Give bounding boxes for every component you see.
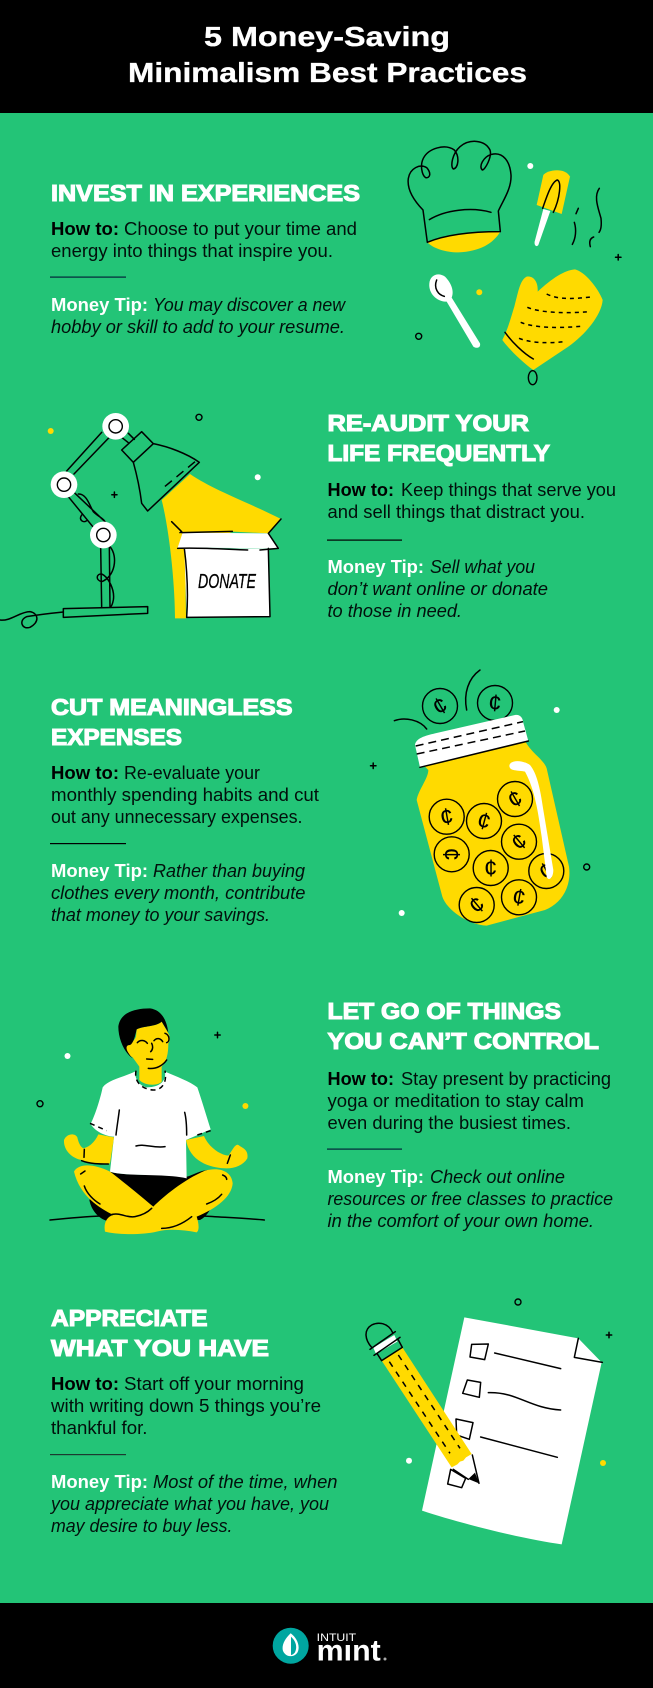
coins: ¢ [484,855,497,882]
how to text: Choose to put your time and [124,218,357,239]
icon: spoon [429,274,480,348]
heading: EXPENSES [51,724,182,750]
how to text: Stay present by practicing [401,1068,611,1089]
money tip text: Rather than buying [153,860,306,881]
money tip text: in the comfort of your own home. [328,1210,594,1231]
how to text [51,218,357,261]
heading: CUT MEANINGLESS [51,694,292,720]
how to text: Re-evaluate your [124,762,260,783]
icon: mint leaf [273,1628,309,1664]
shirt [91,1072,211,1178]
logo: intuit mint: INTUIT [317,1632,356,1644]
money tip text: Money Tip: [51,1471,148,1492]
money tip text: clothes every month, contribute [51,882,306,903]
coins: ¢ [534,856,559,886]
heading [328,998,599,1054]
body line details [81,1033,230,1228]
legs [74,1165,233,1234]
money tip text: Most of the time, when [153,1471,338,1492]
money tip text [49,1471,337,1536]
how to text: Start off your morning [124,1373,304,1394]
jar body [394,670,569,926]
how to text [328,479,616,522]
jar lid and highlight [415,715,553,879]
money tip text [51,860,306,925]
light beam [162,474,281,618]
panel: cut meaningless expenses [50,670,590,926]
money tip text [328,1166,613,1231]
illustration: checklist and pencil [366,1317,602,1544]
icon: checklist paper [422,1317,602,1544]
money tip text: may desire to buy less. [51,1515,232,1536]
coins: ¢ [438,848,465,861]
heading: APPRECIATE [51,1305,208,1331]
header banner [0,0,653,113]
logo: intuit mint: mint [317,1635,381,1668]
illustration: coin jar [370,670,590,926]
money tip text: resources or free classes to practice [328,1188,613,1209]
heading: LET GO OF THINGS [328,998,561,1024]
money tip text: Money Tip: [328,1166,424,1187]
icon: chef hat [408,141,511,252]
hair [118,1008,168,1058]
title [128,21,527,88]
icon: lamp [0,413,199,628]
coins: ¢ [474,807,494,836]
icon: pencil [366,1323,479,1483]
box label: DONATE [198,571,256,593]
coins: ¢ [438,803,456,832]
how to text: How to: [328,479,394,500]
money tip text: Check out online [430,1166,565,1187]
panel: re-audit your life frequently [0,410,616,628]
heading [51,1305,269,1361]
money tip text [51,294,347,337]
heading: WHAT YOU HAVE [51,1335,269,1361]
coins: ¢ [510,883,528,912]
heading [51,694,292,750]
heading: INVEST IN EXPERIENCES [51,180,360,206]
illustration: meditating person [50,1008,264,1234]
coins: ¢ [463,891,491,920]
how to text: out any unnecessary expenses. [51,806,302,827]
panel: let go of things you can't control [37,998,613,1234]
shorts [89,1170,213,1222]
illustration: chef hat, spatula, spoon and oven mitt [408,141,603,385]
how to text: with writing down 5 things you’re [50,1395,321,1416]
money tip text: don’t want online or donate [328,578,548,599]
heading: RE-AUDIT YOUR [328,410,529,436]
money tip text [328,556,548,621]
title: Minimalism Best Practices [128,57,527,88]
icon: spatula [535,170,570,246]
money tip text: hobby or skill to add to your resume. [51,316,345,337]
money tip text: Money Tip: [328,556,424,577]
arms [64,1134,248,1168]
how to text: How to: [328,1068,394,1089]
how to text: and sell things that distract you. [328,501,585,522]
coins: ¢ [506,827,533,857]
coins: ¢ [487,689,503,718]
how to text: thankful for. [51,1417,148,1438]
icon: oven mitt [502,269,603,385]
money tip text: you appreciate what you have, you [49,1493,329,1514]
footer banner [0,1603,653,1688]
face and neck [125,1022,170,1085]
how to text [51,762,319,827]
how to text: Keep things that serve you [401,479,616,500]
money tip text: Sell what you [430,556,535,577]
how to text: How to: [51,762,119,783]
panel: invest in experiences [50,141,621,385]
how to text: How to: [51,1373,119,1394]
money tip text: You may discover a new [153,294,347,315]
heading [328,410,550,466]
how to text: even during the busiest times. [328,1112,571,1133]
money tip text: to those in need. [328,600,462,621]
ground lines [50,1216,264,1220]
panel: appreciate what you have [49,1299,612,1544]
coins: ¢ [503,784,528,814]
coins: ¢ [428,691,453,721]
illustration: desk lamp and donate box [0,413,281,628]
coins [422,686,564,922]
title: 5 Money-Saving [204,21,450,52]
heading: LIFE FREQUENTLY [328,440,550,466]
heading: YOU CAN’T CONTROL [328,1028,599,1054]
steam lines [572,188,601,247]
how to text [328,1068,611,1133]
money tip text: Money Tip: [51,860,148,881]
how to text: monthly spending habits and cut [51,784,319,805]
how to text: How to: [51,218,119,239]
how to text: yoga or meditation to stay calm [328,1090,584,1111]
how to text: energy into things that inspire you. [51,240,333,261]
logo: intuit mint [273,1628,386,1668]
money tip text: that money to your savings. [51,904,270,925]
money tip text: Money Tip: [51,294,148,315]
icon: donate box [172,519,281,617]
how to text [50,1373,321,1438]
